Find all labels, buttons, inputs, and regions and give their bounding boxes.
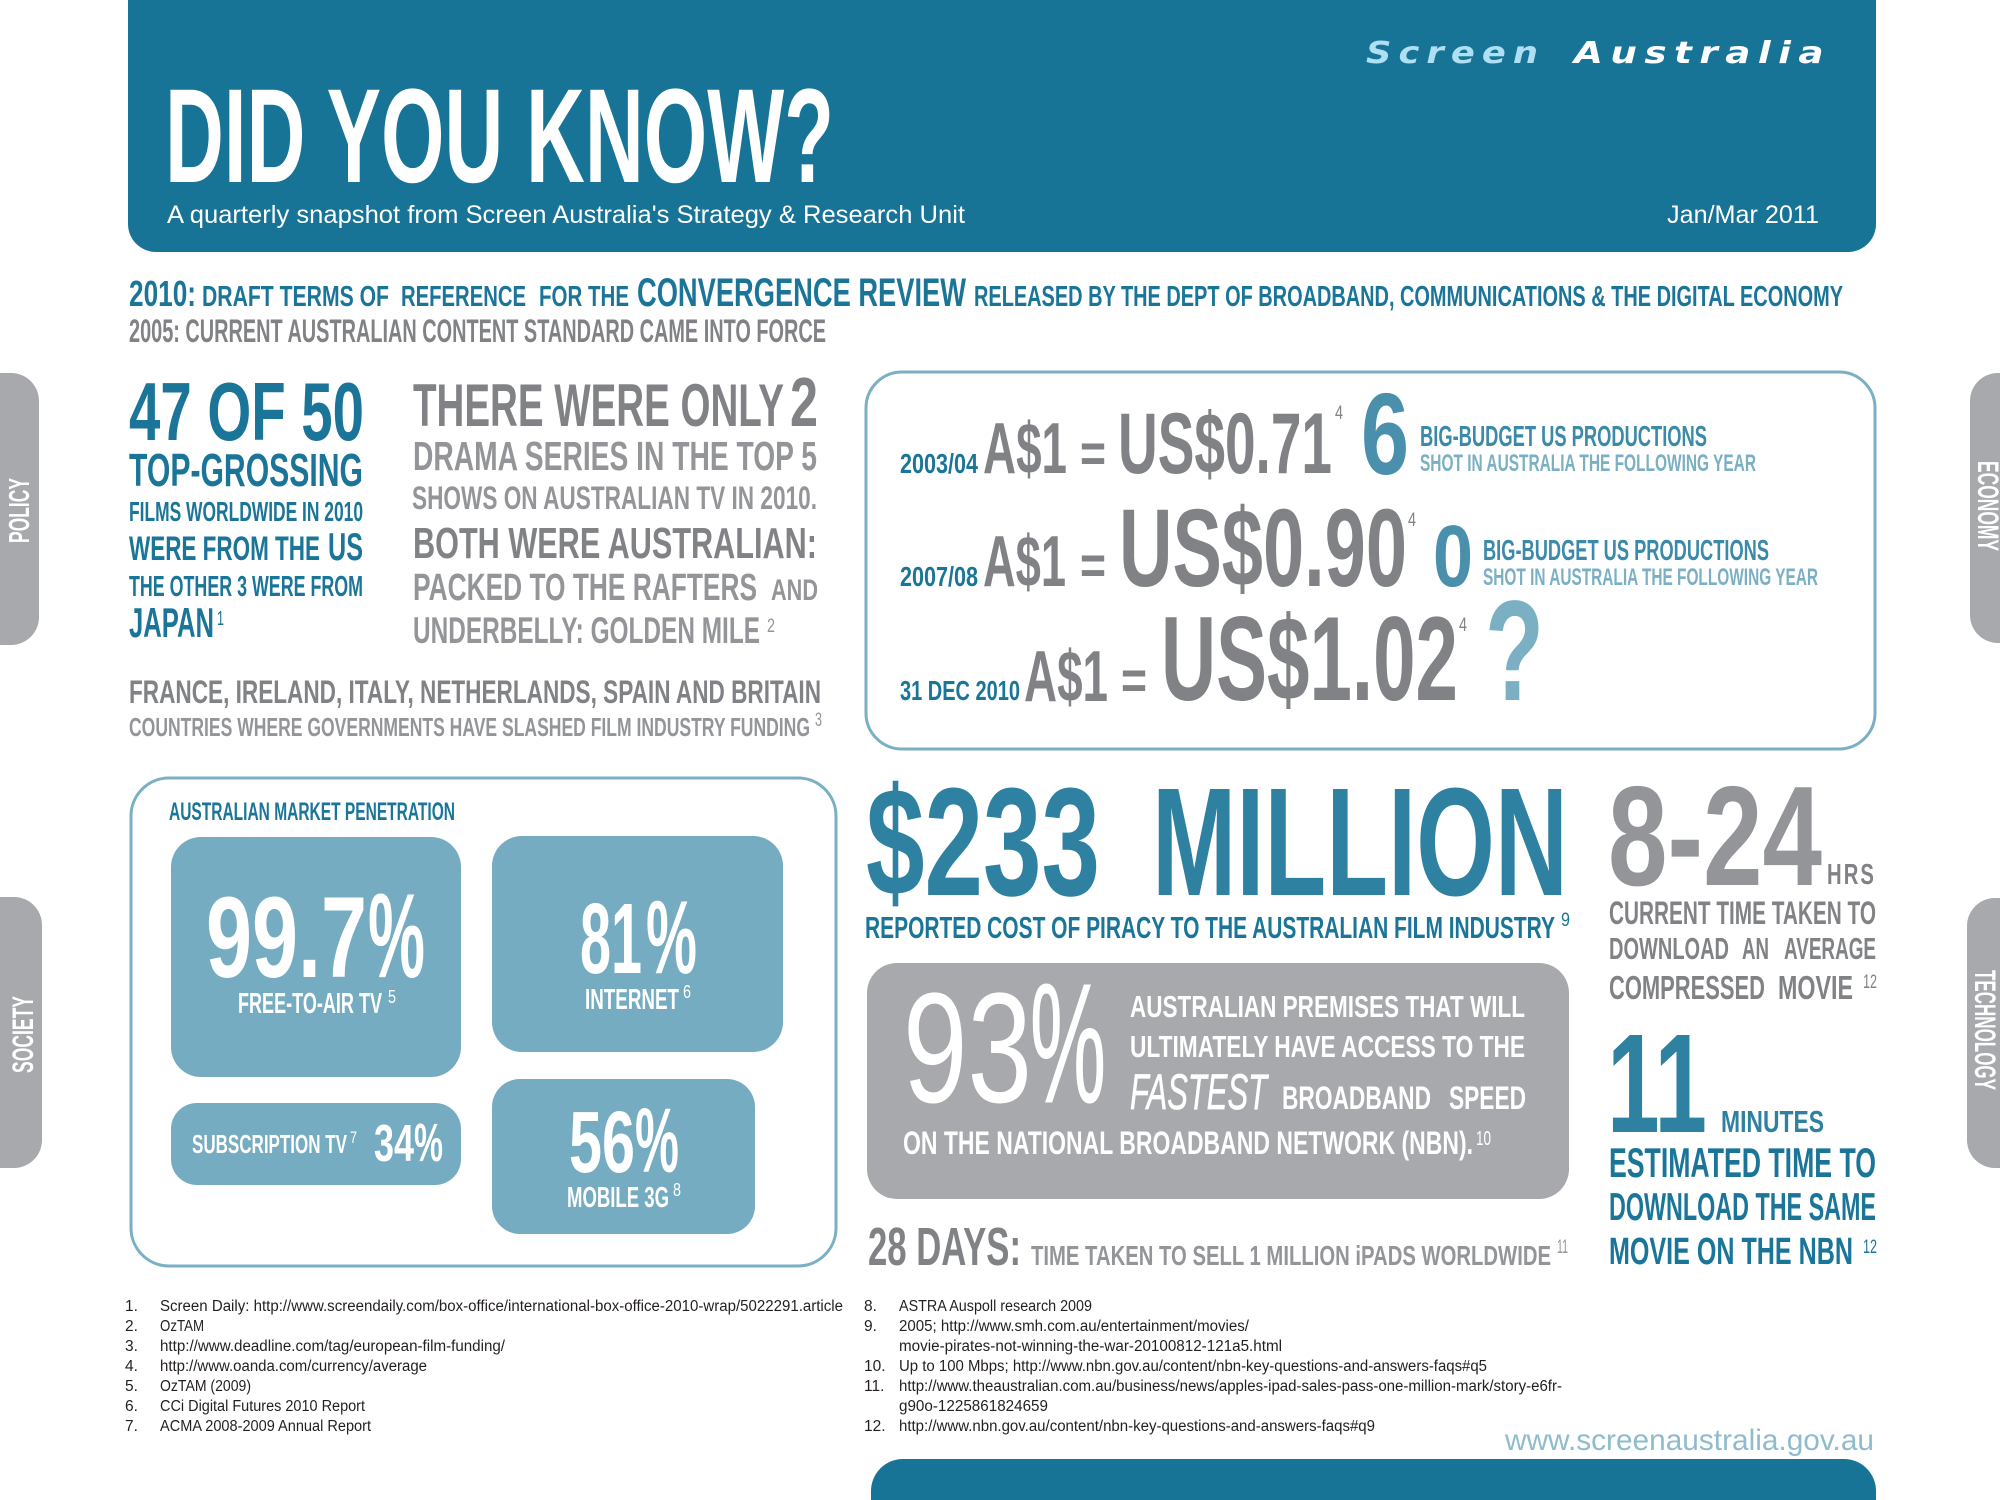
footnotes: right column: http://www.nbn.gov.au/content/nbn-key-questions-and-answers-faqs#q9 — [899, 1418, 1375, 1435]
stat: internet — [492, 836, 783, 1052]
footnotes: right column: 12. — [864, 1418, 886, 1435]
logo: Screen Australia: Screen — [1366, 36, 1545, 71]
convergence review headline — [129, 271, 1843, 315]
panel: NBN 93 percent: 10 — [1476, 1128, 1491, 1150]
footnotes: left column: 6. — [125, 1398, 138, 1415]
exchange row 2007/08: A$1 — [983, 522, 1066, 602]
logo: Screen Australia: Australia — [1572, 36, 1831, 71]
exchange row 31 Dec 2010: ? — [1485, 572, 1544, 731]
stat: free-to-air TV: 5 — [388, 987, 396, 1007]
top grossing films block: TOP-GROSSING — [129, 444, 363, 496]
stat: internet: 6 — [683, 982, 691, 1002]
download time stat: AVERAGE — [1784, 931, 1876, 966]
stat: free-to-air TV — [171, 837, 461, 1077]
download time stat: 12 — [1863, 972, 1877, 993]
stat: free-to-air TV: FREE-TO-AIR TV — [238, 988, 382, 1020]
exchange row 31 Dec 2010: 31 DEC 2010 — [900, 675, 1020, 706]
footnotes: left column: OzTAM (2009) — [160, 1378, 251, 1395]
download time stat — [1608, 757, 1877, 1006]
panel: NBN 93 percent — [867, 949, 1569, 1199]
footnotes: right column: 11. — [864, 1378, 884, 1395]
exchange row 2003/04: 2003/04 — [900, 448, 978, 479]
exchange row 2003/04: = — [1080, 422, 1106, 484]
piracy cost stat: MILLION — [1152, 756, 1568, 928]
footnotes: left column: 5. — [125, 1378, 138, 1395]
drama series block: AND — [771, 574, 818, 607]
stat: mobile 3G: 56 — [569, 1094, 635, 1191]
film funding cuts block: COUNTRIES WHERE GOVERNMENTS HAVE SLASHED FILM INDUSTRY FUNDING — [129, 712, 810, 742]
drama series block: BOTH WERE AUSTRALIAN: — [413, 519, 817, 568]
date: Jan/Mar 2011 — [1667, 201, 1819, 229]
content standard line: 2005: CURRENT AUSTRALIAN CONTENT STANDARD CAME INTO FORCE — [129, 313, 826, 349]
top grossing films block: THE OTHER 3 WERE FROM — [129, 571, 363, 603]
NBN download stat: 12 — [1863, 1237, 1877, 1258]
convergence review headline: CONVERGENCE REVIEW — [637, 271, 966, 315]
stat: mobile 3G: 8 — [673, 1180, 681, 1200]
film funding cuts block: 3 — [815, 710, 822, 731]
panel: NBN 93 percent: BROADBAND — [1282, 1080, 1431, 1116]
top grossing films block: US — [328, 526, 363, 569]
stat: subscription TV: 7 — [350, 1128, 357, 1147]
footer bar — [871, 1459, 1876, 1500]
film funding cuts block — [129, 674, 822, 742]
stat: internet: % — [646, 880, 697, 996]
panel: NBN 93 percent: ON THE NATIONAL BROADBAND NETWORK (NBN). — [903, 1125, 1473, 1161]
exchange row 2007/08: US$0.90 — [1119, 487, 1407, 610]
stat: mobile 3G: % — [635, 1090, 679, 1192]
footnotes: left column: Screen Daily: http://www.screendaily.com/box-office/international-box-office-2010-wrap/5022291.article — [160, 1298, 843, 1315]
iPads stat: 11 — [1557, 1237, 1568, 1258]
stat: mobile 3G: MOBILE 3G — [567, 1182, 669, 1214]
footnotes: right column: 2005; http://www.smh.com.au/entertainment/movies/ — [899, 1318, 1250, 1335]
convergence review headline: 2010: — [129, 273, 196, 314]
stat: mobile 3G — [492, 1079, 755, 1234]
convergence review headline: FOR THE — [539, 281, 629, 313]
film funding cuts block: FRANCE, IRELAND, ITALY, NETHERLANDS, SPAIN AND BRITAIN — [129, 674, 821, 710]
top grossing films block: JAPAN — [129, 599, 214, 646]
title: DID YOU KNOW? — [165, 62, 834, 211]
download time stat: MOVIE — [1778, 969, 1853, 1006]
footnotes: left column: 7. — [125, 1418, 138, 1435]
stat: internet: 81 — [580, 883, 642, 995]
drama series block: DRAMA SERIES IN THE TOP 5 — [413, 433, 817, 479]
NBN download stat — [1607, 1004, 1877, 1273]
exchange row 2007/08: 2007/08 — [900, 561, 978, 592]
panel: NBN 93 percent: 93 — [903, 961, 1032, 1136]
footnotes: left column: 4. — [125, 1358, 138, 1375]
drama series block: PACKED TO THE RAFTERS — [413, 567, 757, 609]
footnotes: right column — [864, 1298, 1562, 1435]
iPads stat: 28 DAYS: — [868, 1217, 1021, 1277]
footnotes: left column: http://www.deadline.com/tag/european-film-funding/ — [160, 1338, 506, 1355]
stat: subscription TV: 34 — [374, 1115, 414, 1173]
piracy cost stat — [865, 756, 1570, 945]
stat: internet: INTERNET — [585, 984, 679, 1016]
panel heading: AUSTRALIAN MARKET PENETRATION — [169, 798, 455, 826]
footnotes: left column: ACMA 2008-2009 Annual Report — [160, 1418, 372, 1435]
panel: NBN 93 percent: SPEED — [1449, 1080, 1526, 1116]
exchange row 2007/08: SHOT IN AUSTRALIA THE FOLLOWING YEAR — [1483, 564, 1818, 591]
footnotes: right column: 9. — [864, 1318, 877, 1335]
footnotes: right column: 8. — [864, 1298, 877, 1315]
top grossing films block: 1 — [217, 608, 224, 630]
stat: free-to-air TV: % — [368, 869, 425, 1003]
society tab: SOCIETY — [7, 996, 40, 1073]
exchange row 2003/04: BIG-BUDGET US PRODUCTIONS — [1420, 421, 1707, 453]
exchange row 2007/08: BIG-BUDGET US PRODUCTIONS — [1483, 535, 1769, 567]
piracy cost stat: REPORTED COST OF PIRACY TO THE AUSTRALIAN FILM INDUSTRY — [865, 910, 1555, 945]
footnotes: right column: http://www.theaustralian.com.au/business/news/apples-ipad-sales-pass-one-million-mark/story-e6fr- — [899, 1378, 1562, 1395]
piracy cost stat: 9 — [1561, 910, 1570, 931]
footnotes: right column: Up to 100 Mbps; http://www.nbn.gov.au/content/nbn-key-questions-and-answers-faqs#q5 — [899, 1358, 1487, 1375]
stat: subscription TV: % — [414, 1113, 443, 1173]
footnotes: left column: 2. — [125, 1318, 138, 1335]
exchange row 2003/04 — [900, 369, 1756, 499]
top grossing films block: FILMS WORLDWIDE IN 2010 — [129, 496, 363, 527]
footnotes: left column: http://www.oanda.com/currency/average — [160, 1358, 427, 1375]
download time stat: 8-24 — [1608, 757, 1822, 916]
exchange row 2007/08: 4 — [1408, 510, 1416, 531]
top grossing films block — [129, 365, 364, 646]
subtitle: A quarterly snapshot from Screen Australia's Strategy & Research Unit — [167, 201, 965, 229]
footnotes: left column: 3. — [125, 1338, 138, 1355]
technology tab — [1967, 898, 2000, 1168]
economy tab — [1970, 373, 2000, 643]
exchange row 31 Dec 2010: US$1.02 — [1161, 592, 1458, 726]
footnotes: right column: 10. — [864, 1358, 886, 1375]
exchange row 31 Dec 2010: = — [1121, 649, 1147, 711]
NBN download stat: MOVIE ON THE NBN — [1609, 1231, 1853, 1273]
convergence review headline: DRAFT TERMS OF — [202, 281, 389, 313]
download time stat: COMPRESSED — [1609, 969, 1765, 1006]
exchange row 31 Dec 2010 — [900, 572, 1544, 731]
footnotes: left column: 1. — [125, 1298, 138, 1315]
NBN download stat: 11 — [1607, 1004, 1707, 1162]
iPads stat — [868, 1217, 1568, 1277]
stat: subscription TV: SUBSCRIPTION TV — [192, 1129, 347, 1159]
exchange row 2003/04: US$0.71 — [1118, 396, 1332, 492]
footnotes: left column — [125, 1298, 843, 1435]
stat: subscription TV — [171, 1103, 461, 1185]
exchange row 2003/04: 4 — [1335, 403, 1343, 424]
panel: exchange rate — [866, 369, 1875, 749]
exchange row 2007/08 — [900, 487, 1818, 610]
download time stat: AN — [1742, 931, 1769, 966]
panel: NBN 93 percent: % — [1030, 949, 1106, 1139]
exchange row 2007/08: = — [1080, 534, 1106, 596]
website URL: www.screenaustralia.gov.au — [1504, 1424, 1874, 1457]
panel: NBN 93 percent: AUSTRALIAN PREMISES THAT WILL — [1130, 989, 1525, 1024]
download time stat: DOWNLOAD — [1609, 931, 1729, 966]
stat: free-to-air TV: 99.7 — [206, 874, 367, 1002]
drama series block: THERE WERE ONLY — [413, 372, 784, 439]
panel: NBN 93 percent: FASTEST — [1130, 1064, 1269, 1120]
exchange row 2003/04: SHOT IN AUSTRALIA THE FOLLOWING YEAR — [1420, 450, 1756, 477]
footnotes: right column: movie-pirates-not-winning-the-war-20100812-121a5.html — [899, 1338, 1282, 1355]
logo: Screen Australia — [1366, 36, 1831, 71]
iPads stat: TIME TAKEN TO SELL 1 MILLION iPADS WORLDWIDE — [1031, 1240, 1551, 1271]
exchange row 2003/04: A$1 — [983, 409, 1067, 489]
NBN download stat: MINUTES — [1721, 1104, 1824, 1139]
panel: Australian market penetration — [131, 778, 836, 1266]
footnotes: left column: CCi Digital Futures 2010 Report — [160, 1398, 366, 1415]
download time stat: HRS — [1827, 859, 1876, 891]
policy tab: POLICY — [4, 478, 36, 543]
panel: NBN 93 percent: ULTIMATELY HAVE ACCESS TO THE — [1130, 1029, 1525, 1064]
drama series block: 2 — [767, 616, 775, 637]
footnotes: right column: g90o-1225861824659 — [899, 1398, 1048, 1415]
header banner — [128, 0, 1876, 252]
drama series block: 2 — [790, 363, 818, 441]
exchange row 2003/04: 6 — [1361, 369, 1409, 499]
society tab — [0, 897, 42, 1168]
top grossing films block: 47 OF 50 — [129, 365, 364, 458]
policy tab — [0, 373, 39, 645]
exchange row 31 Dec 2010: 4 — [1459, 615, 1467, 636]
exchange row 2007/08: 0 — [1433, 508, 1473, 605]
drama series block — [412, 363, 818, 651]
footnotes: right column: ASTRA Auspoll research 2009 — [899, 1298, 1092, 1315]
top grossing films block: WERE FROM THE — [129, 530, 320, 568]
convergence review headline: REFERENCE — [401, 281, 526, 313]
footnotes: left column: OzTAM — [160, 1318, 204, 1335]
piracy cost stat: $233 — [866, 756, 1100, 928]
drama series block: UNDERBELLY: GOLDEN MILE — [413, 610, 760, 651]
drama series block: SHOWS ON AUSTRALIAN TV IN 2010. — [412, 480, 817, 516]
exchange row 31 Dec 2010: A$1 — [1024, 637, 1108, 717]
